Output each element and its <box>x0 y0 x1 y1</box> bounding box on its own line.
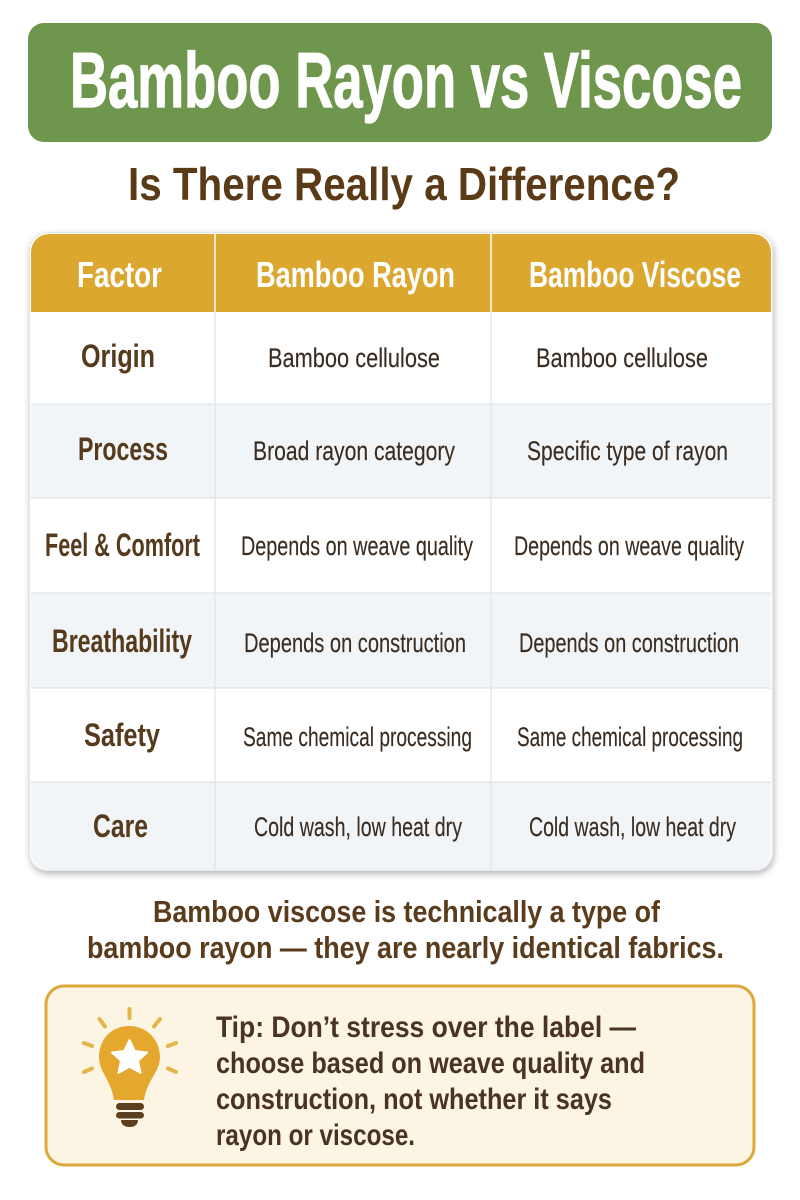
tip text: rayon or viscose. <box>216 1119 415 1152</box>
tip text: construction, not whether it says <box>216 1083 612 1116</box>
summary text <box>87 894 724 965</box>
row: safety: Safety <box>84 717 160 753</box>
row: process: Broad rayon category <box>253 436 455 466</box>
icon: light bulb with star <box>84 1009 176 1127</box>
row: origin <box>81 338 708 374</box>
row: care <box>93 808 736 844</box>
comparison table <box>30 232 772 870</box>
row: process: Specific type of rayon <box>527 436 728 466</box>
tip text <box>216 1011 645 1152</box>
row: care: Cold wash, low heat dry <box>254 812 462 842</box>
row: origin: Bamboo cellulose <box>268 343 440 373</box>
row: feel and comfort <box>45 527 744 563</box>
row: safety: Same chemical processing <box>243 722 472 752</box>
summary text: bamboo rayon — they are nearly identical fabrics. <box>87 930 724 965</box>
row: feel and comfort: Feel & Comfort <box>45 527 200 563</box>
row: process: Process <box>78 431 168 467</box>
row: care: Care <box>93 808 148 844</box>
table header: Bamboo Rayon <box>256 254 455 295</box>
row: feel and comfort: Depends on weave quality <box>241 531 473 561</box>
tip text: Tip: Don’t stress over the label — <box>216 1011 636 1044</box>
row: breathability <box>52 623 739 659</box>
row: breathability: Breathability <box>52 623 192 659</box>
row: origin: Bamboo cellulose <box>536 343 708 373</box>
table header <box>77 254 741 295</box>
tip text: choose based on weave quality and <box>216 1047 645 1080</box>
row: origin: Origin <box>81 338 155 374</box>
row: breathability: Depends on construction <box>244 628 466 658</box>
subtitle: Is There Really a Difference? <box>128 158 680 210</box>
row: safety <box>84 717 743 753</box>
tip callout <box>46 986 754 1165</box>
summary text: Bamboo viscose is technically a type of <box>153 894 661 929</box>
title banner <box>28 23 772 142</box>
table header: Factor <box>77 254 162 295</box>
row: process <box>78 431 728 467</box>
